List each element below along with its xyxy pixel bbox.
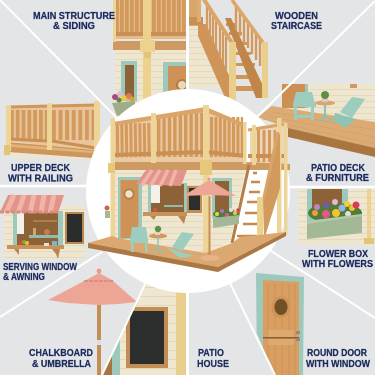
table xyxy=(315,100,335,106)
right chair xyxy=(166,232,194,258)
label: serving window: SERVING WINDOW xyxy=(3,261,77,273)
awning xyxy=(0,195,64,213)
deck floor xyxy=(88,232,286,272)
label: umbrella: & UMBRELLA xyxy=(32,358,91,370)
umbrella xyxy=(48,269,137,375)
label: siding: & SIDING xyxy=(53,20,95,32)
upper deck railing xyxy=(113,104,286,166)
flower box xyxy=(112,101,135,116)
label: main structure: MAIN STRUCTURE xyxy=(33,10,115,22)
label: house: HOUSE xyxy=(197,358,229,370)
house wall xyxy=(113,169,246,253)
panel: patio deck and furniture xyxy=(258,84,375,157)
panel: serving window and awning xyxy=(0,195,85,259)
central patio house illustration xyxy=(88,104,290,272)
window xyxy=(121,61,137,101)
label: staircase: STAIRCASE xyxy=(271,20,322,32)
table and plant xyxy=(149,226,167,253)
deck band xyxy=(114,162,290,170)
label: with railing: WITH RAILING xyxy=(8,172,73,184)
right stringer xyxy=(225,18,266,98)
panel: round door with window xyxy=(256,273,304,375)
left chair xyxy=(130,227,148,252)
awning xyxy=(136,170,187,186)
plant xyxy=(322,98,328,102)
label: patio deck: PATIO DECK xyxy=(311,162,365,174)
left stringer xyxy=(198,24,229,98)
counter xyxy=(7,245,64,249)
chair right xyxy=(333,97,365,128)
right window xyxy=(212,178,232,218)
panel: chalkboard and umbrella, patio house wall xyxy=(100,283,186,375)
panel: main structure and siding xyxy=(112,0,188,118)
stair steps xyxy=(226,23,255,91)
flower box front xyxy=(213,208,240,228)
door xyxy=(163,62,186,92)
left wall flower box xyxy=(104,206,110,218)
posts xyxy=(110,118,115,238)
flowers xyxy=(308,199,362,220)
chalkboard xyxy=(126,307,168,368)
serving window xyxy=(143,183,187,224)
door xyxy=(118,177,142,239)
left balusters xyxy=(207,6,226,70)
label: awning: & AWNING xyxy=(3,271,45,283)
chalkboard xyxy=(187,186,202,213)
label: chalkboard: CHALKBOARD xyxy=(29,347,93,359)
staircase xyxy=(232,132,280,249)
right balusters xyxy=(236,5,260,66)
panel: upper deck with railing xyxy=(4,101,100,159)
label: upper deck: UPPER DECK xyxy=(11,162,70,174)
label: wooden: WOODEN xyxy=(275,10,318,22)
chalkboard xyxy=(65,212,84,244)
central white circle xyxy=(86,89,290,293)
label: patio: PATIO xyxy=(198,347,224,359)
panel: wooden staircase xyxy=(189,0,268,103)
panel: flower box with flowers xyxy=(298,189,375,245)
umbrella xyxy=(183,178,236,261)
chair left xyxy=(293,92,316,120)
